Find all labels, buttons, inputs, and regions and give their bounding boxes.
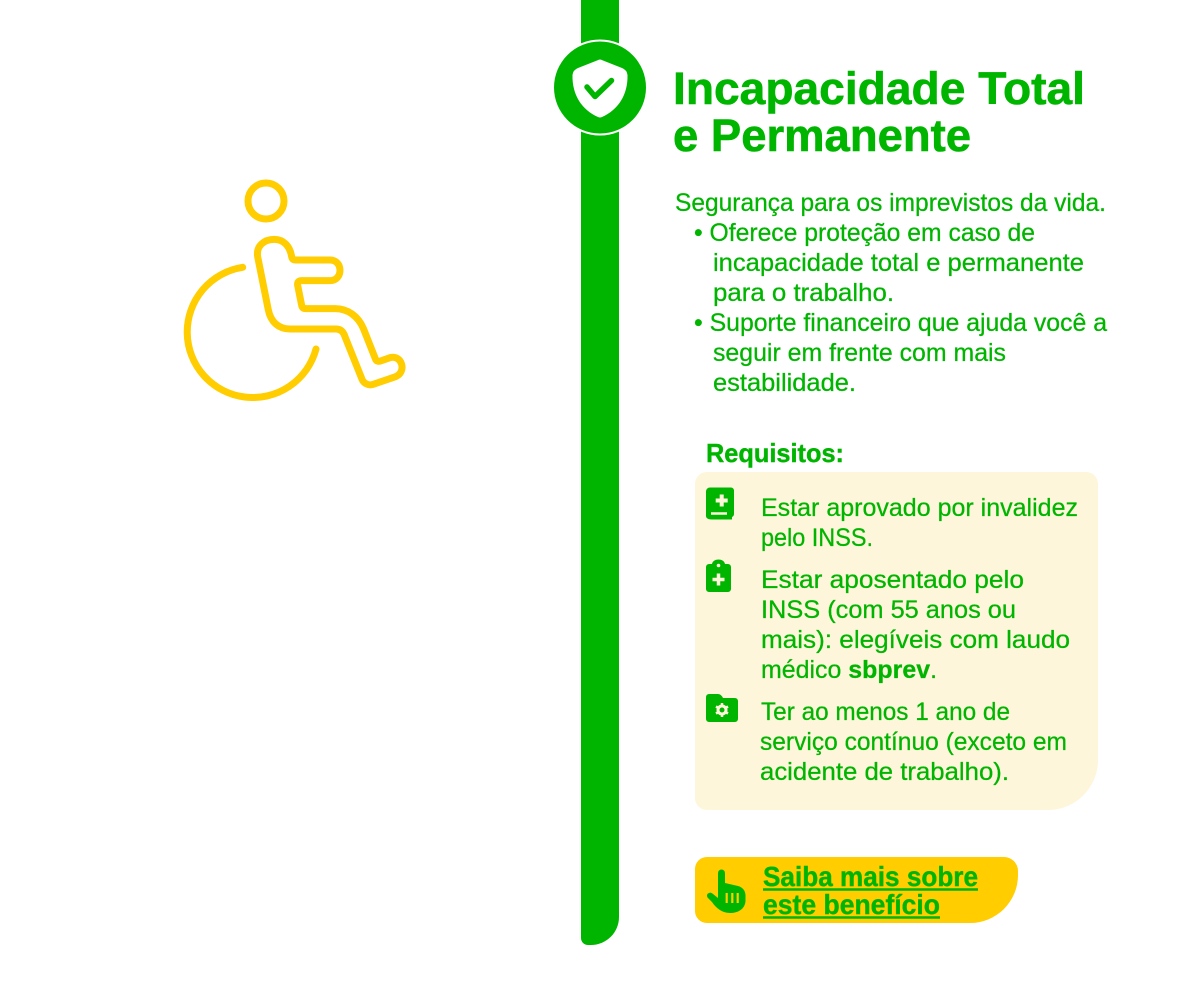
requirement text: aposentado: INSS (com 55 anos ou — [761, 596, 1016, 624]
requirement text: servico continuo: acidente de trabalho). — [760, 758, 1009, 786]
button label: Saiba mais sobre — [763, 861, 978, 892]
text block: description and benefits: Segurança para os imprevistos da vida. — [675, 189, 1106, 217]
requirement text: invalidez: pelo INSS. — [761, 524, 873, 552]
icon: wheelchair user — [187, 183, 402, 398]
requirement text: aposentado — [761, 566, 1070, 684]
text block: description and benefits: seguir em frente com mais — [713, 339, 1006, 367]
requirement text: aposentado: Estar aposentado pelo — [761, 566, 1024, 594]
title — [673, 63, 1085, 161]
button label: este benefício — [763, 889, 940, 920]
timeline bar — [581, 0, 619, 945]
requirement text: aposentado: médico sbprev. — [761, 656, 937, 684]
icon: folder with gear — [706, 694, 738, 722]
text block: description and benefits: estabilidade. — [713, 369, 856, 397]
title: Incapacidade Total — [673, 63, 1085, 114]
text block: description and benefits: • Oferece proteção em caso de — [694, 219, 1035, 247]
text block: description and benefits: incapacidade total e permanente — [713, 249, 1084, 277]
text block: description and benefits: • Suporte financeiro que ajuda você a — [694, 309, 1107, 337]
requirement text: invalidez: Estar aprovado por invalidez — [761, 494, 1078, 522]
requirement text: aposentado: mais): elegíveis com laudo — [761, 626, 1070, 654]
icon: shield with check badge — [552, 40, 648, 136]
text block: description and benefits — [675, 189, 1107, 397]
button label — [763, 861, 978, 920]
icon: medical clipboard — [706, 560, 731, 592]
requirement text: servico continuo: serviço contínuo (exceto em — [760, 728, 1067, 756]
icon: medical book — [706, 488, 734, 520]
heading: requisitos: Requisitos: — [706, 438, 844, 468]
requirement text: servico continuo: Ter ao menos 1 ano de — [761, 698, 1010, 726]
button: saiba mais — [695, 857, 1018, 923]
title: e Permanente — [673, 110, 971, 161]
panel: requirements — [695, 472, 1098, 810]
requirement text: invalidez — [761, 494, 1078, 552]
text block: description and benefits: para o trabalho. — [713, 279, 894, 307]
icon: pointing hand — [707, 870, 746, 913]
requirement text: servico continuo — [760, 698, 1067, 786]
